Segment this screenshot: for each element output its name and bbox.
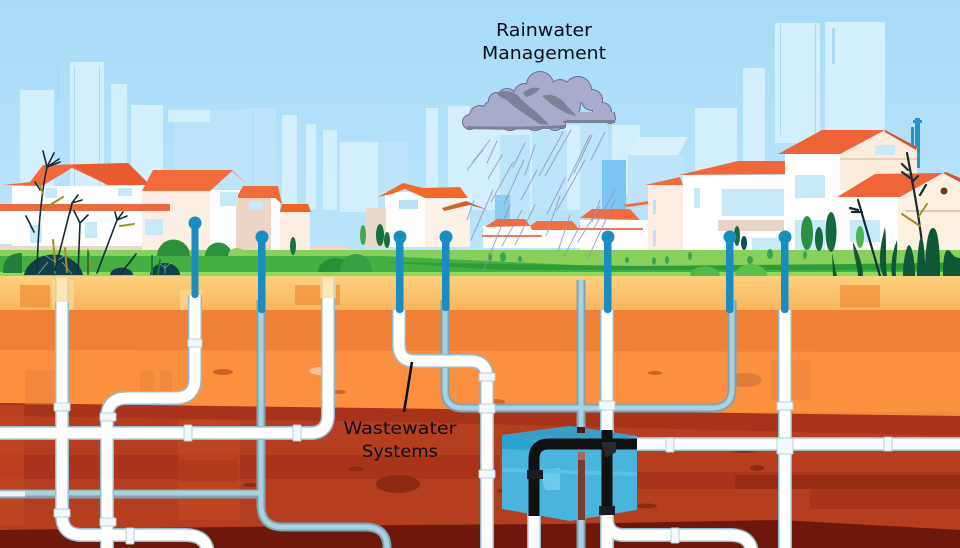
label: wastewater systems: Systems: [362, 442, 438, 462]
label: wastewater systems: [344, 419, 457, 462]
factory tower at right: [911, 118, 922, 168]
grass: [0, 250, 960, 276]
water storage tank: [502, 426, 637, 521]
cloud shadows: [466, 88, 614, 130]
label: wastewater systems: Wastewater: [344, 419, 457, 439]
heading: rainwater management: Rainwater: [496, 20, 593, 41]
right foliage clumps: [832, 227, 960, 276]
underground soil layers: [0, 276, 960, 548]
cloud outline: [462, 71, 616, 131]
storm cloud with rain: [462, 71, 616, 269]
heading: rainwater management: Management: [482, 43, 606, 64]
hedges and shrubs: [3, 240, 767, 276]
grey-blue pipes: [0, 280, 732, 548]
small trees: [290, 212, 864, 265]
blue rainwater inlets: [188, 216, 792, 313]
faded pipe tops blending into the topsoil: [54, 276, 336, 302]
soil specks and stones: [213, 367, 762, 405]
tall reeds and plants: [26, 151, 927, 276]
heading: rainwater management: [482, 20, 606, 64]
rain streaks: [467, 130, 615, 269]
cloud body: [463, 72, 615, 130]
right houses: [645, 130, 960, 250]
left houses: [0, 163, 350, 257]
sky background: [0, 0, 960, 280]
white pipes: [0, 278, 960, 548]
centre-left houses: [366, 183, 650, 250]
pipe couplings: [54, 339, 892, 544]
city skyline: [20, 22, 885, 225]
pointer line to wastewater label: [404, 362, 412, 412]
